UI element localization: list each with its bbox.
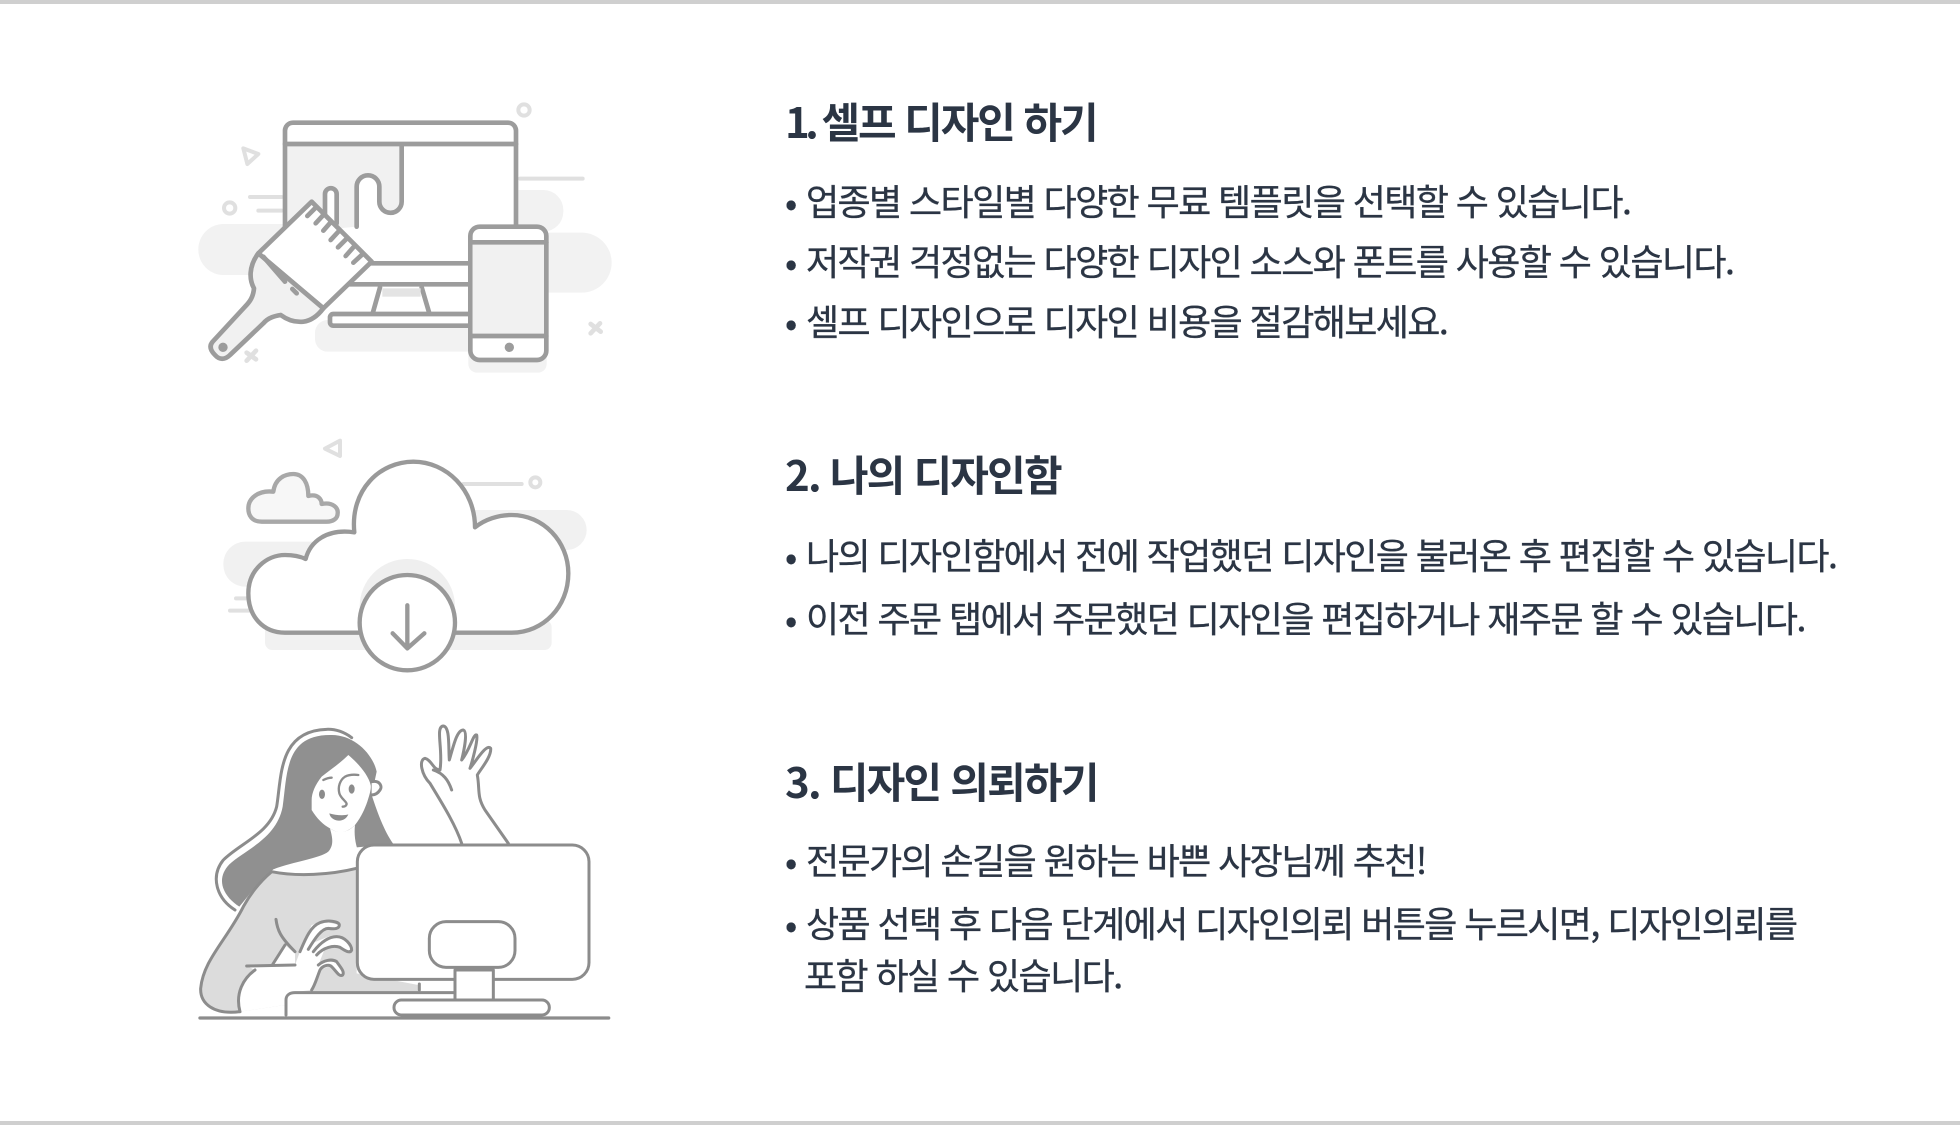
- text: section 2 bullet 1: 나의 디자인함에서 전에 작업했던 디자인을 불러온 후 편집할 수 있습니다.: [806, 528, 1836, 580]
- text: section 1 bullet 2: •: [785, 235, 797, 287]
- text: section 3 bullet 1: 전문가의 손길을 원하는 바쁜 사장님께 추천!: [806, 833, 1426, 885]
- phone: [470, 227, 546, 360]
- raised hand: [421, 726, 508, 843]
- top border bar: [0, 0, 1960, 4]
- text: section 1 bullet 3: •: [785, 295, 797, 347]
- computer: [357, 845, 589, 979]
- text: section 2 bullet 1: •: [785, 529, 797, 581]
- icon: cloud download: [223, 441, 587, 670]
- heading: section 2: 2. 나의 디자인함: [785, 443, 1061, 504]
- text: section 3 bullet 2: •: [785, 897, 797, 949]
- sweater: [201, 868, 418, 1012]
- text: section 3 bullet 2 continued: 포함 하실 수 있습니다.: [804, 948, 1122, 1000]
- text: section 3 bullet 2: 상품 선택 후 다음 단계에서 디자인의뢰 버튼을 누르시면, 디자인의뢰를: [806, 896, 1796, 948]
- heading: section 1: 1. 셀프 디자인 하기: [785, 90, 1097, 151]
- paint brush: [211, 202, 372, 359]
- face details: [319, 790, 325, 799]
- icon: monitor, paint brush and phone: [198, 104, 612, 373]
- icon: woman waving at computer: [200, 726, 609, 1018]
- text: section 1 bullet 3: 셀프 디자인으로 디자인 비용을 절감해보세요.: [806, 294, 1447, 346]
- bottom border bar: [0, 1121, 1960, 1125]
- text: section 2 bullet 2: 이전 주문 탭에서 주문했던 디자인을 편집하거나 재주문 할 수 있습니다.: [806, 591, 1805, 643]
- heading: section 3: 3. 디자인 의뢰하기: [785, 750, 1098, 811]
- typing hand: [238, 922, 352, 1012]
- text: section 3 bullet 1: •: [785, 834, 797, 886]
- text: section 1 bullet 2: 저작권 걱정없는 다양한 디자인 소스와 폰트를 사용할 수 있습니다.: [806, 234, 1733, 286]
- text: section 1 bullet 1: •: [785, 175, 797, 227]
- text: section 1 bullet 1: 업종별 스타일별 다양한 무료 템플릿을 선택할 수 있습니다.: [806, 174, 1630, 226]
- text: section 2 bullet 2: •: [785, 592, 797, 644]
